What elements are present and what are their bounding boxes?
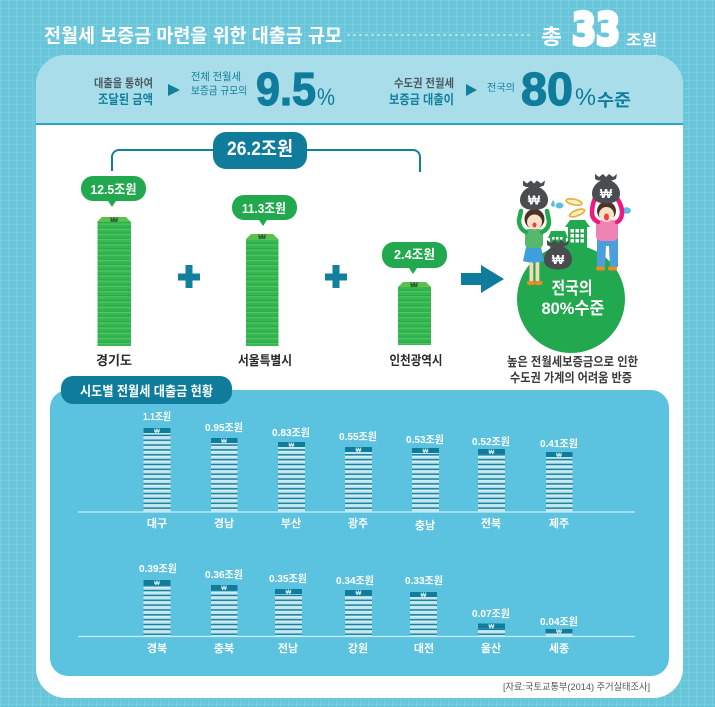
bar: 경북	[139, 562, 177, 655]
left statement	[94, 63, 335, 115]
bar: 전남: 전남	[278, 642, 298, 655]
bar: 강원: ₩	[356, 591, 362, 597]
total amount: 조원	[626, 32, 657, 49]
left statement: 보증금 규모의	[191, 85, 247, 97]
bar: 전북	[472, 435, 510, 530]
bubble: 11.3조원: 11.3조원	[242, 201, 286, 216]
illustration: woman with money bag	[519, 180, 549, 285]
right statement: %	[575, 84, 596, 111]
bracket: capital area total	[112, 132, 420, 172]
bar: 대구: 1.1조원	[143, 410, 171, 423]
bar: 대구: ₩	[154, 429, 160, 435]
bar: 경남: ₩	[221, 439, 227, 445]
bar: 충북: 0.36조원	[205, 568, 243, 581]
panel: regional loans	[50, 376, 669, 676]
green circle callout: 80%수준	[542, 299, 604, 318]
stack: 인천광역시	[382, 242, 447, 368]
bar: 강원: 강원	[348, 641, 368, 655]
left statement: %	[317, 84, 335, 111]
bar: 세종: ₩	[556, 630, 562, 636]
left statement: 대출을 통하여	[94, 76, 153, 90]
bar: 광주: 광주	[348, 517, 368, 530]
bracket: capital area total: 26.2조원	[227, 138, 293, 160]
bar: 부산: ₩	[289, 443, 295, 449]
bar: 충남: ₩	[423, 449, 429, 455]
bar: 경남: 0.95조원	[205, 421, 243, 434]
bar: 부산	[272, 426, 310, 530]
bar: 충남: 충남	[415, 519, 435, 532]
right statement	[389, 63, 631, 115]
bar: 경북: 0.39조원	[139, 562, 177, 575]
bar: 대전: 0.33조원	[405, 574, 443, 587]
bar: 충북	[205, 568, 243, 655]
bar: 세종: 세종	[549, 642, 569, 655]
bar: 광주: ₩	[356, 448, 362, 454]
bar: 제주	[540, 437, 578, 530]
bar: 충북: 충북	[214, 642, 234, 655]
bar: 부산: 0.83조원	[272, 426, 310, 439]
illustration: man with money bag	[592, 174, 622, 270]
bar: 충남	[406, 433, 444, 532]
bar: 전남: ₩	[286, 590, 292, 596]
panel heading	[61, 376, 232, 404]
bar: 광주	[339, 430, 377, 530]
bar: 제주: ₩	[556, 453, 562, 459]
bar: 전북: 전북	[481, 517, 501, 530]
bar: 대전: ₩	[421, 593, 427, 599]
right statement: 전국의	[487, 82, 515, 94]
green circle callout	[517, 245, 625, 353]
bar: 광주: 0.55조원	[339, 430, 377, 443]
plus	[178, 265, 200, 288]
stack: 서울특별시: ₩	[258, 233, 266, 242]
caption	[507, 354, 638, 385]
stack: 경기도: ₩	[110, 216, 118, 225]
stack: 인천광역시: ₩	[410, 281, 418, 290]
left statement: 9.5	[256, 63, 316, 115]
bubble: 12.5조원: 12.5조원	[90, 182, 136, 197]
bar: 제주: 제주	[549, 516, 569, 530]
left statement: 전체 전월세	[191, 71, 241, 83]
bar: 부산: 부산	[281, 516, 301, 530]
right statement: 80	[521, 63, 573, 115]
total amount: 총	[541, 26, 562, 49]
bar: 경북: ₩	[154, 581, 160, 587]
bar: 경북: 경북	[147, 642, 167, 655]
left statement: 조달된 금액	[98, 92, 153, 107]
bar: 울산: 0.07조원	[472, 607, 510, 620]
illustration: coins and drops	[551, 198, 631, 219]
bar: 전남: 0.35조원	[269, 572, 307, 585]
arrow	[461, 265, 504, 293]
bar: 제주: 0.41조원	[540, 437, 578, 450]
right statement: 수준	[597, 91, 631, 110]
bar: 전북: 0.52조원	[472, 435, 510, 448]
bar: 세종: 0.04조원	[540, 615, 578, 628]
illustration: centre money bag	[544, 240, 572, 270]
caption: 높은 전월세보증금으로 인한	[507, 354, 638, 369]
plus	[325, 265, 347, 288]
caption: 수도권 가계의 어려움 반증	[510, 370, 632, 385]
green circle callout: 전국의	[552, 279, 592, 298]
bar: 대전: 대전	[414, 641, 434, 655]
stack: 경기도: 경기도	[96, 353, 132, 368]
right statement: 보증금 대출이	[389, 92, 454, 107]
stack: 경기도	[81, 176, 146, 368]
bar: 충남: 0.53조원	[406, 433, 444, 446]
panel heading: 시도별 전월세 대출금 현황	[80, 383, 214, 399]
bar: 전남	[269, 572, 307, 655]
stack: 인천광역시: 인천광역시	[390, 353, 442, 368]
bar: 세종	[540, 615, 578, 655]
bubble: 2.4조원: 2.4조원	[394, 247, 435, 262]
stack: 서울특별시	[232, 195, 297, 368]
bar: 울산: 울산	[481, 641, 501, 655]
total amount	[541, 4, 657, 56]
bar: 경남	[205, 421, 243, 530]
bar: 대구: 대구	[147, 516, 167, 530]
bar: 강원	[336, 574, 374, 655]
illustration: houses	[548, 220, 590, 257]
bar: 전북: ₩	[489, 450, 495, 456]
bar: 강원: 0.34조원	[336, 574, 374, 587]
bubble: 12.5조원	[81, 176, 146, 207]
right statement: 수도권 전월세	[394, 76, 454, 90]
bar: 대구	[143, 410, 171, 530]
bar: 충북: ₩	[221, 586, 227, 592]
total amount: 33	[572, 4, 620, 56]
bubble: 11.3조원	[232, 195, 297, 226]
top summary band	[36, 55, 683, 125]
source: [자료:국토교통부(2014) 주거실태조사]	[503, 682, 650, 693]
stack: 서울특별시: 서울특별시	[238, 353, 292, 368]
bar: 경남: 경남	[214, 517, 234, 530]
bar: 울산: ₩	[489, 624, 495, 630]
bar: 울산	[472, 607, 510, 655]
title: 전월세 보증금 마련을 위한 대출금 규모	[44, 25, 342, 47]
bar: 대전	[405, 574, 443, 655]
